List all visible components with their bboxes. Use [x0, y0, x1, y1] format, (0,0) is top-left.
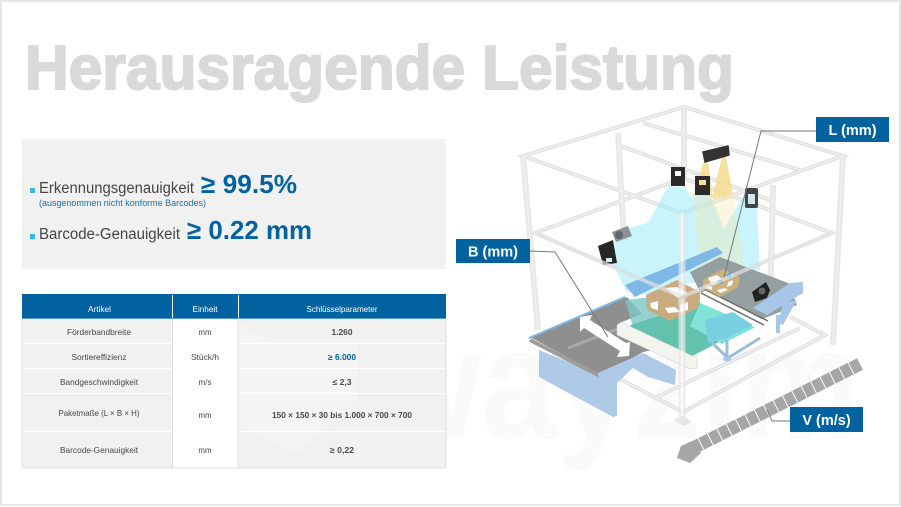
- light beams: yellow line scanner: [693, 157, 733, 199]
- text: recognition accuracy label: Erkennungsgenauigkeit: [39, 180, 195, 197]
- row: belt speed: m/s: [198, 378, 212, 387]
- callout: speed: V (m/s): [802, 413, 851, 429]
- table header: Schlüsselparameter: [306, 305, 378, 314]
- conveyor belt: [530, 297, 652, 376]
- row: sorting efficiency: [72, 353, 356, 362]
- title: Herausragende Leistung: [25, 34, 734, 103]
- camera: top right: [745, 188, 758, 208]
- callout: length: L (mm): [828, 123, 877, 139]
- note: exclusion: (ausgenommen nicht konforme Barcodes): [39, 198, 206, 208]
- row: barcode accuracy: Barcode-Genauigkeit: [60, 446, 139, 455]
- row: belt width: [67, 328, 353, 337]
- row: barcode accuracy: [60, 446, 354, 455]
- table: technical parameters: [22, 294, 446, 468]
- row: sorting efficiency: ≥ 6.000: [328, 353, 356, 362]
- table header: Einheit: [192, 305, 218, 314]
- table header: [22, 294, 446, 319]
- callout: speed: [767, 407, 863, 432]
- light beams: cyan cameras: [612, 186, 760, 300]
- table header: Artikel: [88, 305, 111, 314]
- value: recognition accuracy: ≥ 99.5%: [201, 169, 297, 199]
- camera: top line scanner: [703, 146, 729, 162]
- speed arrow: [677, 364, 860, 463]
- width arrow: [580, 315, 630, 357]
- parcel: small box: [703, 269, 740, 297]
- row: belt width: 1.260: [332, 328, 353, 337]
- bullet: barcode accuracy: [30, 234, 35, 239]
- row: belt width: Förderbandbreite: [67, 328, 131, 337]
- row: belt width: mm: [198, 328, 212, 337]
- row: parcel dimensions: Paketmaße (L × B × H): [58, 409, 140, 418]
- left infeed conveyor: [529, 297, 676, 417]
- illustration: scanning tunnel: [523, 107, 843, 426]
- callout: length: [724, 117, 889, 277]
- rear blue rail: [625, 247, 723, 297]
- callout: width: [456, 239, 608, 337]
- frame: rear structure: [523, 107, 843, 412]
- camera: lower right: [752, 282, 770, 302]
- panel: key accuracy figures: [22, 139, 446, 269]
- right blue rail and stand: [753, 282, 803, 333]
- frame: front posts: [535, 213, 832, 420]
- row: barcode accuracy: mm: [198, 446, 212, 455]
- row: parcel dimensions: 150 × 150 × 30 bis 1.000 × 700 × 700: [272, 411, 412, 420]
- camera: left gray: [612, 226, 632, 242]
- row: parcel dimensions: [58, 409, 412, 420]
- sorter stripes: [700, 289, 768, 329]
- callout: width: B (mm): [468, 244, 518, 260]
- row: sorting efficiency: Stück/h: [191, 353, 219, 362]
- camera: top centre: [695, 176, 710, 195]
- row: sorting efficiency: Sortiereffizienz: [72, 353, 126, 362]
- parcel: large box: [646, 280, 700, 321]
- value: barcode accuracy: ≥ 0.22 mm: [187, 215, 312, 245]
- row: belt speed: [60, 378, 352, 387]
- row: parcel dimensions: mm: [198, 411, 212, 420]
- camera: left black: [598, 240, 617, 265]
- white sorter rail: [617, 322, 697, 369]
- camera: top left: [671, 167, 685, 186]
- frame: foot: [673, 416, 692, 426]
- row: barcode accuracy: ≥ 0,22: [330, 446, 354, 455]
- sorter bed: teal floor: [625, 292, 756, 360]
- row: belt speed: Bandgeschwindigkeit: [60, 378, 139, 387]
- conveyor side housing: [539, 350, 617, 417]
- rear gray conveyor: [690, 257, 797, 320]
- bullet: recognition accuracy: [30, 188, 35, 193]
- row: belt speed: ≤ 2,3: [332, 378, 352, 387]
- light beam: yellow wash: [693, 195, 745, 270]
- text: barcode accuracy label: Barcode-Genauigkeit: [39, 226, 181, 243]
- front cross unit with legs: [705, 312, 760, 362]
- front blue rail: [598, 353, 676, 414]
